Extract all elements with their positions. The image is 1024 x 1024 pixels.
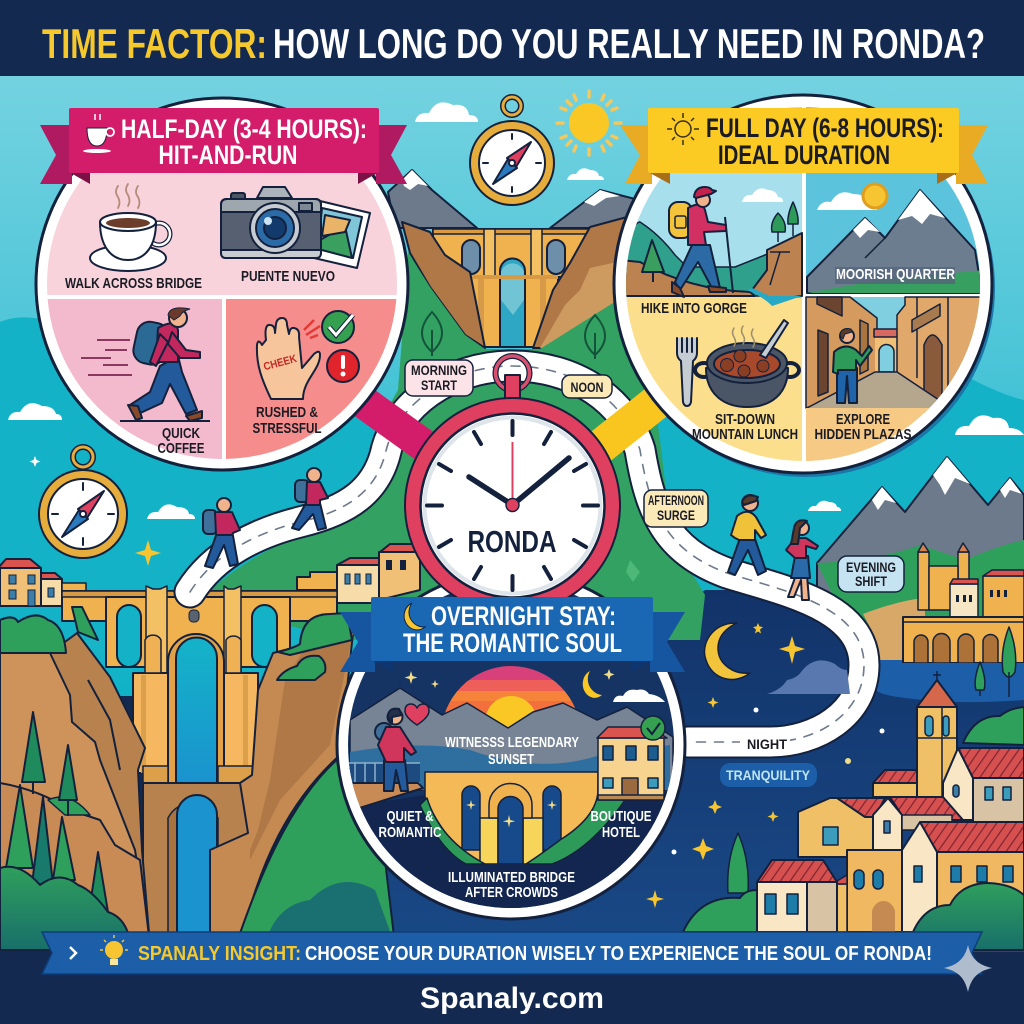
full-day labels (641, 300, 912, 443)
connector: full-day to clock (600, 401, 658, 447)
insight banner: SPANALY INSIGHT: (138, 943, 301, 965)
bridge (62, 586, 337, 783)
banner: overnight (340, 597, 685, 672)
bushes bottom left (0, 867, 132, 950)
icon: banner cup (83, 114, 114, 153)
night stars and moon (30, 456, 884, 908)
half-day labels: QUICK (162, 425, 200, 442)
right castle and viaduct (903, 543, 1024, 663)
half-day labels: WALK ACROSS BRIDGE (65, 275, 202, 292)
scene: moorish quarter mountains: MOORISH QUARTER (836, 266, 955, 283)
scene: ridge (350, 688, 673, 790)
icon: camera and photo (221, 187, 370, 268)
header bar (0, 0, 1024, 76)
full-day labels: MOUNTAIN LUNCH (692, 426, 798, 443)
icon: left compass (39, 447, 127, 558)
gorge column (143, 783, 251, 943)
icon: banner sun (667, 113, 699, 145)
main town block (847, 822, 1024, 932)
night area (235, 590, 1024, 1000)
overnight labels: AFTER CROWDS (465, 884, 558, 901)
header bar: TIME FACTOR: (42, 20, 267, 67)
green hill bottom centre-left (236, 757, 395, 945)
banner: overnight: OVERNIGHT STAY: (431, 601, 616, 631)
banner: full day: FULL DAY (6-8 HOURS): (706, 113, 944, 143)
church tower (917, 671, 957, 797)
small house (757, 860, 847, 932)
banner: half-day: HALF-DAY (3-4 HOURS): (121, 114, 367, 144)
right bottom town (683, 671, 1024, 950)
banner: overnight: THE ROMANTIC SOUL (403, 628, 622, 658)
scene: hillsides (360, 792, 668, 908)
scene: boutique hotel (597, 727, 667, 800)
overnight labels: WITNESSS LEGENDARY (445, 734, 579, 751)
icon: sun (557, 91, 621, 155)
label: noon: NOON (570, 379, 604, 395)
banner: full day: IDEAL DURATION (718, 140, 890, 170)
insight banner (42, 932, 982, 974)
icon: top compass (470, 97, 554, 205)
walker: right woman (786, 520, 818, 600)
half-day labels: COFFEE (158, 440, 204, 457)
back mountains and gorge bridge (388, 170, 635, 348)
icon: running tourist (81, 308, 210, 421)
full-day labels: EXPLORE (836, 411, 890, 428)
label: tranquility: TRANQUILITY (726, 767, 811, 783)
walker: left lower (203, 498, 240, 568)
white gable house (943, 748, 1024, 822)
banner: full day (620, 108, 988, 184)
overnight labels: SUNSET (488, 751, 534, 768)
right part of left town (297, 544, 420, 603)
orange house (798, 797, 963, 860)
icon: hand with check and alert: CHEEK (262, 353, 298, 373)
overnight labels: QUIET & (386, 808, 434, 825)
scene: viewpoint and person (346, 709, 423, 811)
half-day labels (65, 268, 335, 457)
icon: hand with check and alert (257, 311, 359, 399)
overnight labels (378, 734, 652, 901)
overnight labels: BOUTIQUE (590, 808, 652, 825)
label: afternoon surge: SURGE (657, 507, 695, 523)
clock: RONDA (468, 524, 556, 559)
half-day labels: STRESSFUL (252, 420, 322, 437)
left cliff (0, 633, 150, 945)
icon: sparkle (944, 945, 992, 992)
site name: Spanaly.com (420, 982, 604, 1015)
connector: half-day to clock (362, 401, 426, 447)
clouds (8, 102, 1024, 519)
right far landscape (817, 457, 1024, 700)
scene: moorish quarter mountains (807, 184, 985, 293)
label: evening shift (838, 556, 904, 592)
label: morning start: MORNING (411, 362, 467, 378)
green hill around the clock (200, 252, 705, 640)
label: noon (562, 375, 612, 398)
icon: banner moon (404, 603, 425, 630)
clock (405, 356, 620, 613)
winding road (190, 366, 864, 742)
half-day labels: RUSHED & (256, 404, 318, 421)
right trees (728, 627, 1016, 893)
icon: lightbulb (70, 935, 128, 965)
label: evening shift: SHIFT (855, 573, 887, 589)
label: evening shift: EVENING (846, 559, 896, 575)
right cliff (210, 633, 353, 945)
full-day labels: SIT-DOWN (715, 411, 775, 428)
panel: half-day circle (36, 98, 410, 489)
scene: small moon and cloud (404, 669, 665, 702)
icon: stew pot and fork (677, 320, 799, 407)
scene: bridge stars (466, 800, 557, 827)
full-day labels: HIDDEN PLAZAS (814, 426, 912, 443)
water band (876, 663, 1024, 702)
scene: sunset (445, 666, 576, 727)
green on the left cliff (0, 615, 66, 653)
walker: right man (728, 495, 766, 575)
scene: explore hidden plazas (805, 296, 980, 461)
insight banner: CHOOSE YOUR DURATION WISELY TO EXPERIENCE THE SOUL OF RONDA! (305, 943, 932, 965)
left town (0, 559, 86, 606)
label: morning start: START (421, 377, 457, 393)
walker: left upper (292, 468, 328, 530)
scene: bridge (425, 772, 598, 864)
label: afternoon surge: AFTERNOON (648, 492, 704, 508)
panel: overnight circle (337, 570, 685, 920)
footer base (0, 952, 1024, 1024)
full-day labels: HIKE INTO GORGE (641, 300, 747, 317)
badge: hotel check (641, 716, 665, 740)
scene: hike into gorge (620, 187, 802, 306)
icon: coffee cup (90, 184, 170, 271)
label: tranquility (720, 763, 817, 787)
label: night: NIGHT (747, 736, 787, 752)
overnight labels: ILLUMINATED BRIDGE (448, 869, 575, 886)
label: afternoon surge (644, 490, 708, 527)
overnight labels: HOTEL (602, 824, 640, 841)
banner: half-day: HIT-AND-RUN (158, 140, 298, 170)
overnight labels: ROMANTIC (378, 824, 442, 841)
banner: half-day (40, 108, 407, 184)
sky background (0, 76, 1024, 696)
label: morning start (405, 360, 473, 396)
icon: heart (405, 704, 429, 725)
dark bush on the green hill (265, 882, 395, 945)
half-day labels: PUENTE NUEVO (241, 268, 335, 285)
left landscape: town, bridge and cliffs (0, 544, 420, 950)
panel: full-day circle (614, 95, 996, 478)
